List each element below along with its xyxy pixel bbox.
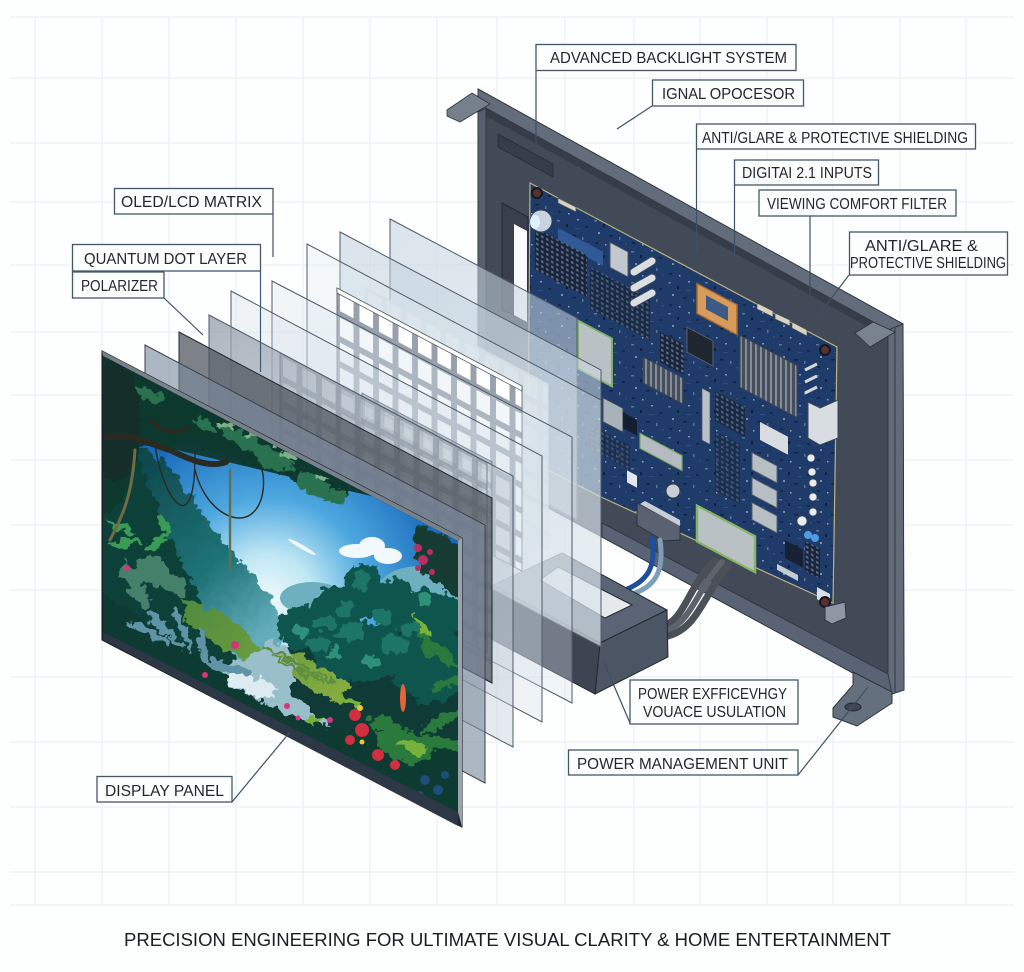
layer: rear diffuser — [390, 219, 577, 520]
lower right plants — [366, 623, 458, 767]
right connector block — [808, 400, 838, 445]
gray cable — [668, 560, 715, 624]
layer: white LED grid — [337, 288, 522, 571]
label: advanced backlight system: ADVANCED BACKLIGHT SYSTEM — [550, 50, 787, 67]
left mountain — [138, 448, 284, 673]
roller capacitors — [634, 261, 652, 303]
top right mounting tab — [855, 322, 895, 347]
label: oled lcd matrix: OLED/LCD MATRIX — [121, 194, 263, 211]
label: power efficiency voltage regulation — [603, 660, 798, 724]
layer: quantum dot — [209, 315, 513, 747]
organic scene shapes — [103, 356, 458, 767]
frame top rim — [478, 89, 903, 330]
label: anti-glare shielding — [696, 124, 976, 252]
label: polarizer — [72, 272, 203, 335]
panel top bezel — [102, 351, 462, 541]
layer: prism sheet — [272, 281, 572, 703]
frame bottom rim — [602, 523, 892, 694]
box window — [540, 567, 632, 618]
top edge connectors — [558, 198, 807, 336]
box left face — [493, 585, 600, 694]
screw holes — [532, 188, 542, 198]
panel body — [102, 351, 462, 827]
frame body — [478, 89, 904, 694]
power management box — [493, 553, 668, 694]
clouds — [287, 537, 402, 564]
layer: dark pixel grid — [280, 353, 487, 653]
label: viewing comfort filter — [759, 190, 956, 313]
label: display panel — [97, 732, 290, 802]
river — [218, 636, 330, 728]
label: display panel: DISPLAY PANEL — [105, 783, 224, 800]
label: power management unit: POWER MANAGEMENT UNIT — [577, 756, 789, 773]
label: advanced backlight system — [536, 44, 796, 147]
branches and vines — [103, 420, 264, 570]
jungle screen image — [103, 356, 458, 812]
label: signal processor — [617, 80, 804, 129]
silver capacitor — [666, 484, 680, 498]
blue berries — [418, 771, 449, 795]
blue capacitors — [804, 531, 812, 539]
foreground lower dark band — [226, 688, 327, 731]
capacitor column — [797, 454, 817, 526]
label: anti-glare shielding two-line: ANTI/GLARE & — [865, 238, 979, 255]
label: anti-glare shielding two-line — [817, 232, 1008, 317]
layer: front polarizer — [145, 345, 485, 783]
lower left plants — [115, 555, 192, 612]
panel bottom bezel — [103, 632, 458, 826]
layer: light grid ghost — [365, 287, 548, 549]
sky — [135, 440, 465, 650]
right forest — [276, 564, 470, 702]
back chassis frame — [447, 89, 904, 726]
board base — [528, 183, 837, 603]
bottom right mounting tab — [833, 672, 892, 726]
right heat bars — [805, 364, 817, 393]
wiring — [625, 538, 729, 636]
layer: polarizer dark — [179, 332, 492, 683]
recessed label plate — [498, 134, 553, 177]
board standoff — [825, 602, 846, 624]
meadow — [180, 597, 352, 705]
label: polarizer: POLARIZER — [81, 278, 158, 295]
top left capacitor — [530, 210, 552, 232]
distant right hills — [280, 566, 458, 609]
display panel — [90, 350, 474, 830]
frame left rim — [478, 108, 486, 470]
blue cable — [625, 538, 653, 590]
top right flowers — [414, 544, 435, 575]
label: anti-glare shielding: ANTI/GLARE & PROTECTIVE SHIELDING — [702, 130, 968, 147]
box right face — [595, 610, 668, 694]
label: power efficiency voltage regulation: POWER EXFFICEVHGY — [638, 686, 787, 703]
label: signal processor: IGNAL OPOCESOR — [662, 86, 795, 103]
transparent optical layers — [145, 219, 601, 783]
yellow flower centres — [357, 705, 364, 744]
label: oled lcd matrix — [114, 188, 273, 257]
layer: colour filter — [231, 291, 542, 722]
side slot — [502, 203, 528, 320]
label: quantum dot layer — [72, 244, 260, 372]
label: power management unit — [568, 687, 868, 775]
frame right rim — [888, 324, 904, 694]
panel right bezel — [458, 538, 462, 827]
pink flowers — [124, 565, 333, 723]
label: digital inputs: DIGITAI 2.1 INPUTS — [742, 165, 872, 182]
red flowers — [345, 684, 406, 770]
title caption: PRECISION ENGINEERING FOR ULTIMATE VISUAL CLARITY & HOME ENTERTAINMENT — [124, 929, 891, 950]
layer: diffuser sheet — [307, 244, 601, 647]
layer: light guide — [340, 232, 601, 647]
canopy — [98, 350, 350, 520]
layer: mid pixel grid — [362, 393, 492, 682]
top right dark foliage — [412, 524, 458, 598]
box top — [493, 553, 667, 643]
board components in board plane — [535, 198, 830, 612]
label: quantum dot layer: QUANTUM DOT LAYER — [84, 251, 247, 268]
label: viewing comfort filter: VIEWING COMFORT FILTER — [767, 196, 947, 213]
cable connector — [637, 503, 680, 541]
far left jungle — [121, 458, 237, 666]
circuit board — [528, 183, 846, 624]
label: digital inputs — [734, 160, 878, 256]
label: power efficiency voltage regulation: VOUACE USULATION — [643, 704, 786, 721]
top left mounting tab — [447, 93, 490, 122]
